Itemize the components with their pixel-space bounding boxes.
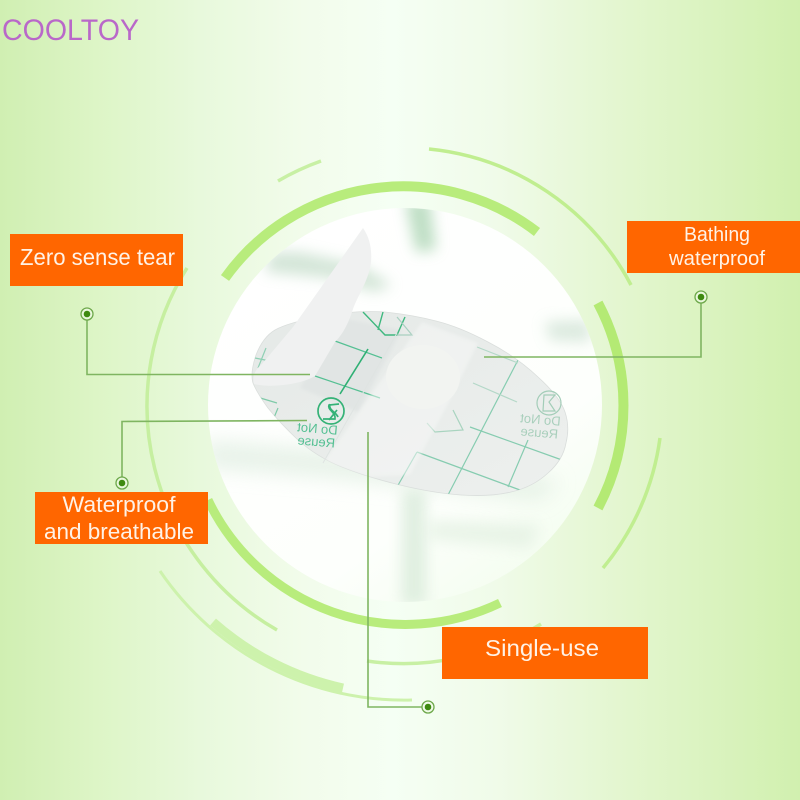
fold shading [300, 318, 402, 412]
peel tab [253, 228, 371, 386]
leader line: single-use [368, 432, 434, 713]
decorative ring arcs [147, 149, 660, 700]
callout: zero sense tear: Zero sense tear [20, 244, 175, 270]
leader line: zero sense tear [81, 308, 310, 374]
mirrored print left: Reuse [297, 432, 336, 451]
callout: single-use [442, 627, 648, 679]
printed grid [255, 312, 562, 495]
callout: single-use: Single-use [485, 635, 599, 661]
callout: bathing waterproof [627, 221, 800, 273]
recycling-style icon left [318, 398, 344, 424]
leader line: waterproof and breathable [116, 420, 307, 489]
callout: zero sense tear [10, 234, 183, 286]
centre strip [326, 334, 434, 477]
brand title: COOLTOY [2, 14, 139, 47]
callout: bathing waterproof: waterproof [668, 248, 765, 270]
product photo disc [205, 200, 602, 605]
callout: waterproof and breathable: and breathable [44, 519, 194, 544]
mirrored print right: Reuse [520, 423, 559, 442]
callout: waterproof and breathable: Waterproof [62, 492, 176, 517]
mirrored print right [518, 410, 561, 442]
recycling-style icon right [537, 391, 561, 415]
mirrored print left: Do Not [296, 419, 338, 438]
patch body [252, 312, 568, 496]
waterproof patch [252, 228, 568, 496]
mirrored print right: Do Not [519, 410, 561, 429]
leader line: bathing waterproof [484, 291, 707, 357]
callout: bathing waterproof: Bathing [684, 224, 750, 246]
callout: waterproof and breathable [35, 492, 208, 544]
mirrored print left [295, 419, 338, 451]
blurred leaf background [205, 200, 590, 605]
round pull sticker [386, 345, 460, 409]
